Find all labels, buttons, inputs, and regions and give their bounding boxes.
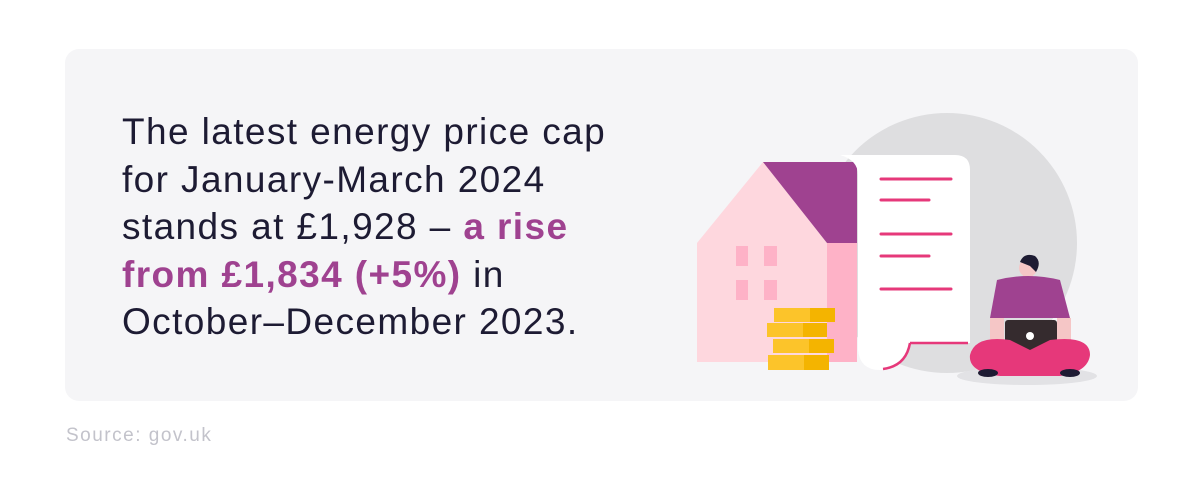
background circle	[817, 113, 1077, 373]
panel	[65, 49, 1138, 401]
text block: October–December 2023.	[122, 301, 579, 342]
text block: from £1,834 (+5%) in	[122, 254, 505, 294]
icon: person with laptop	[957, 255, 1097, 385]
text block	[122, 111, 606, 342]
icon: bill paper	[840, 155, 970, 370]
icon: coins	[767, 308, 835, 370]
text block: stands at £1,928 – a rise	[122, 206, 568, 247]
text block: for January-March 2024	[122, 158, 546, 200]
icon: house	[697, 162, 857, 362]
source: Source: gov.uk	[66, 425, 212, 446]
text block: The latest energy price cap	[122, 111, 606, 152]
